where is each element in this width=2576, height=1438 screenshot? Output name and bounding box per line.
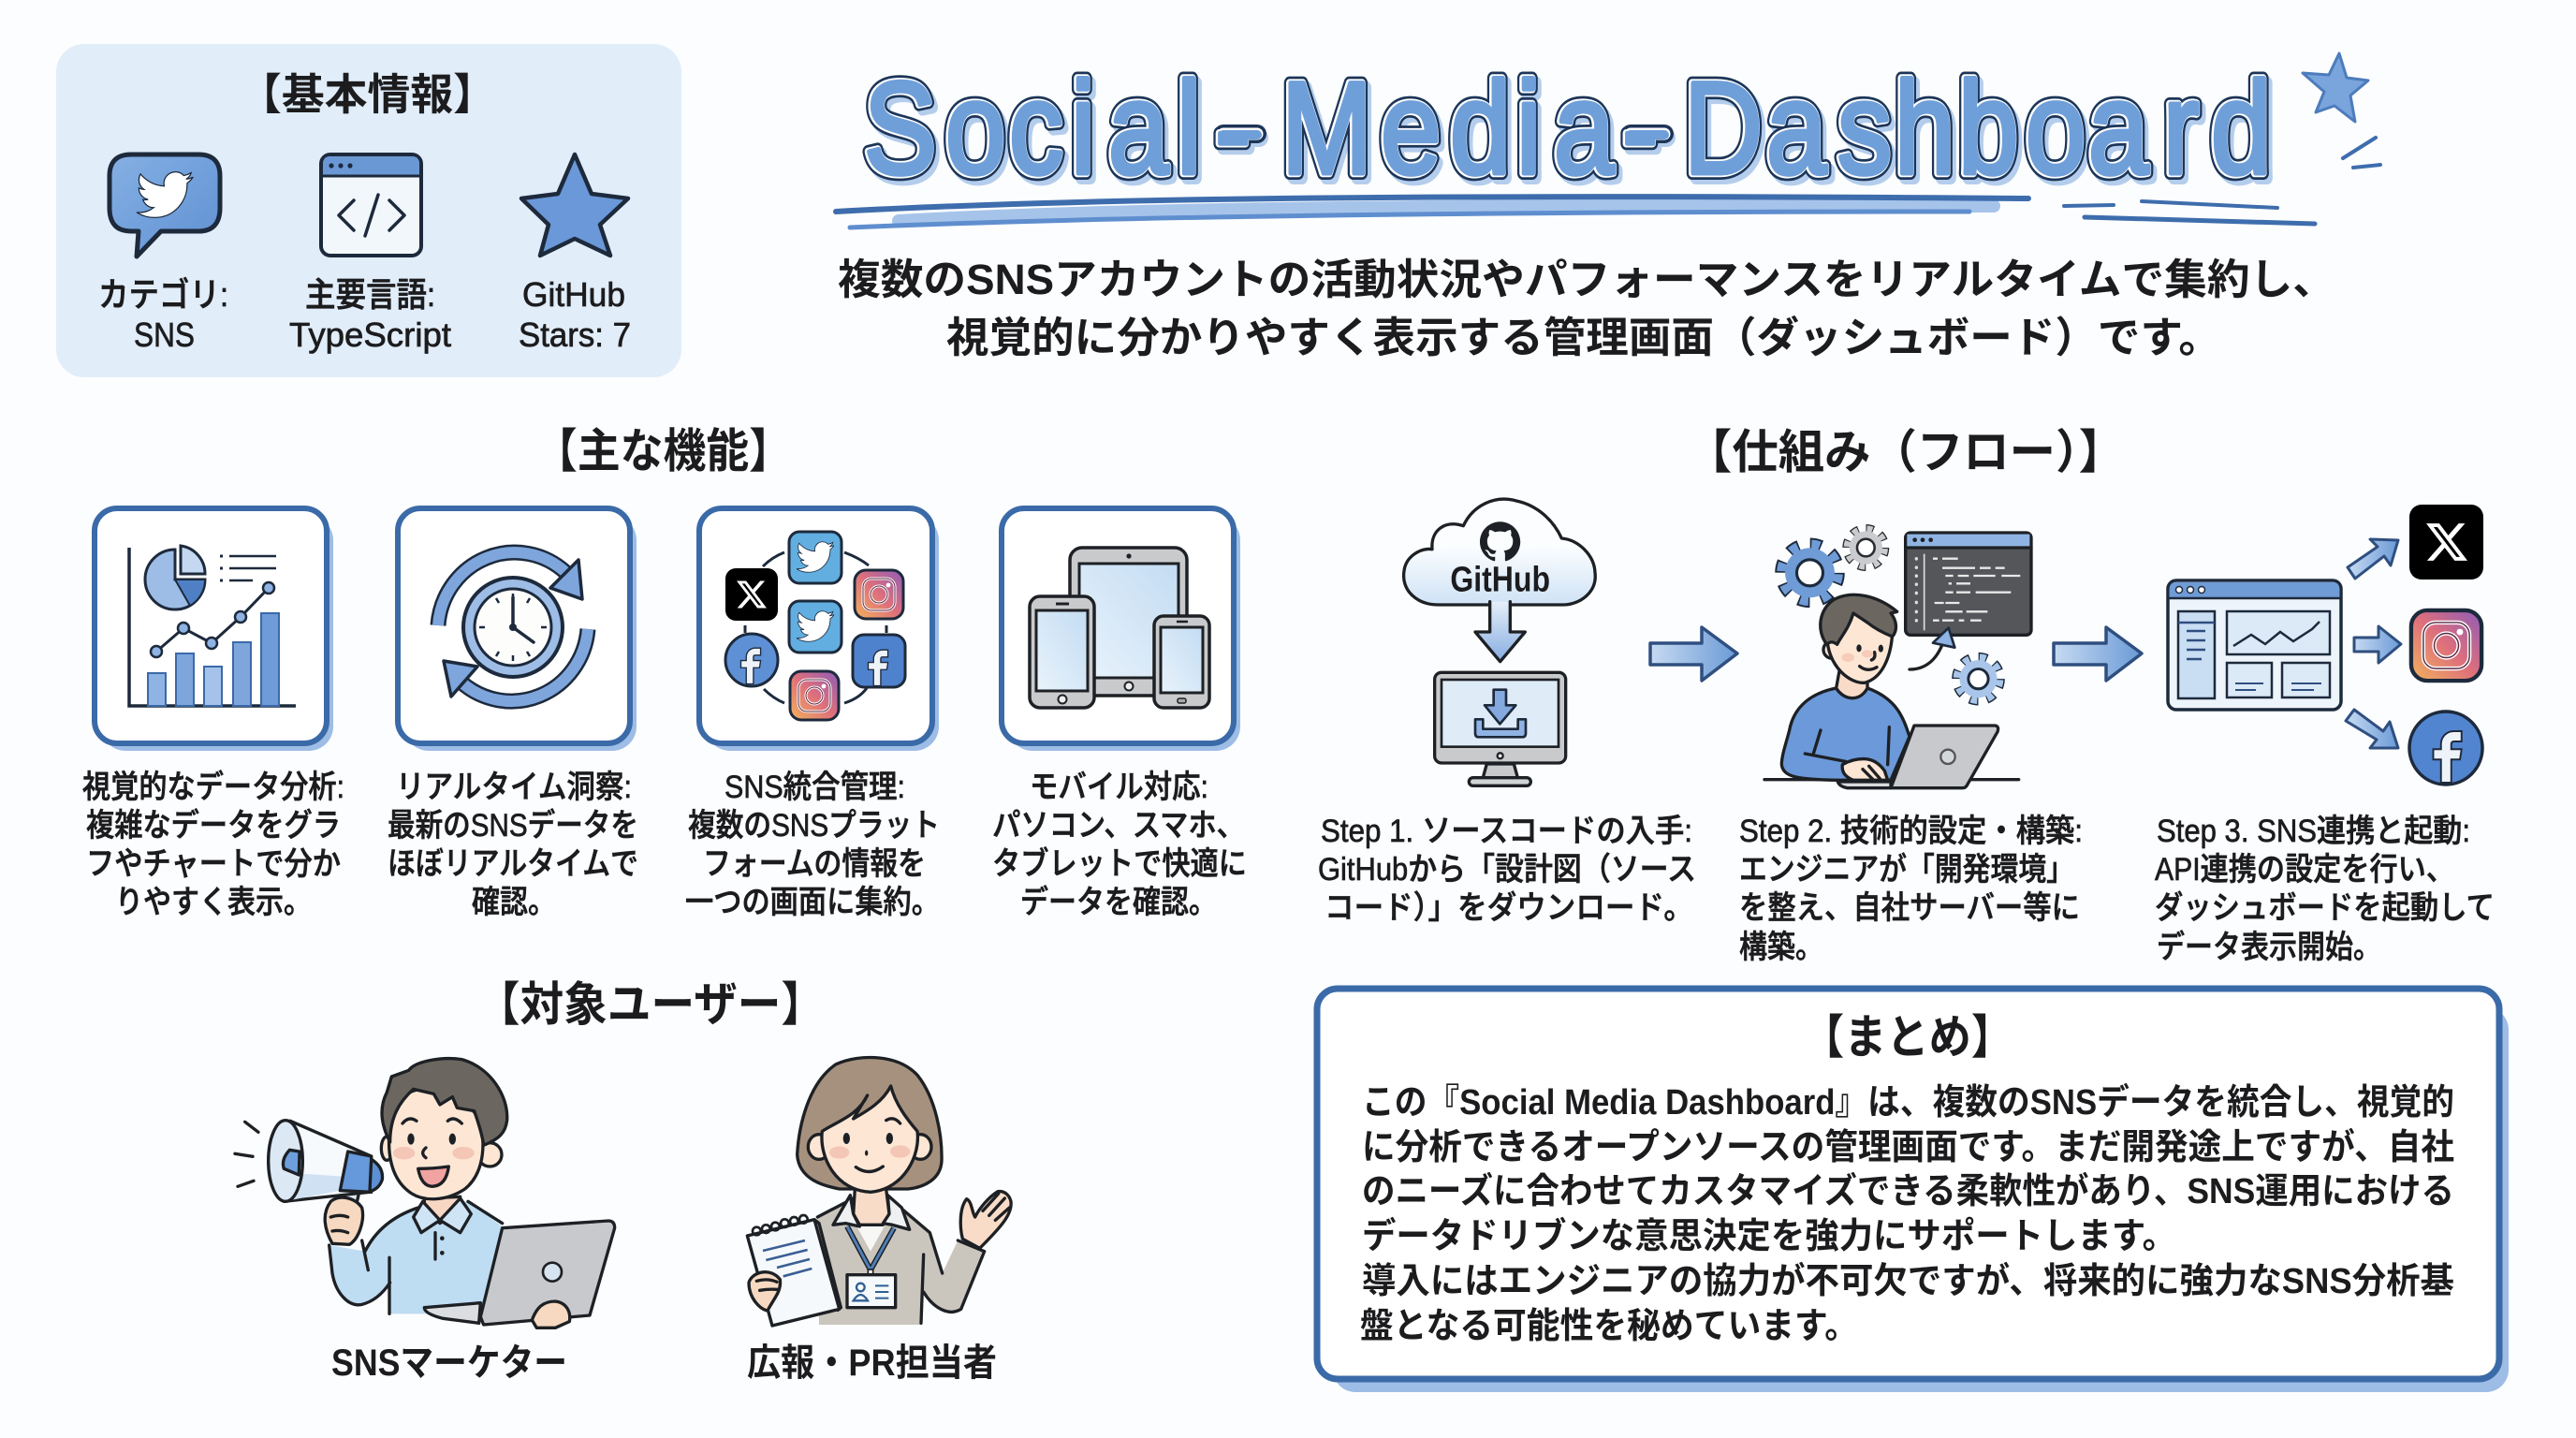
caption: step 3	[2155, 814, 2495, 965]
caption: data analysis: 複雑なデータをグラ	[86, 808, 341, 844]
icon: small arrow	[1910, 628, 1954, 669]
label: PR staff: 広報・PR担当者	[747, 1343, 997, 1384]
caption: step 1	[1318, 814, 1696, 926]
icon: GitHub cloud	[1404, 499, 1595, 605]
user: PR staff	[747, 1057, 1011, 1384]
icon: gears	[1782, 529, 1999, 700]
caption: SNS integration: 一つの画面に集約。	[685, 885, 940, 920]
caption: data analysis: フやチャートで分か	[86, 846, 341, 882]
icon: dashboard window	[2168, 580, 2341, 710]
icon: tablet and phones	[1030, 548, 1209, 708]
caption: step 1: コード）」をダウンロード。	[1325, 890, 1693, 926]
title: Social-Media-Dashboard: Social-Media-Dashboard	[867, 61, 2275, 206]
card: data analysis	[82, 508, 344, 920]
summary body text: 盤となる可能性を秘めています。	[1360, 1307, 1858, 1346]
summary body text	[1360, 1082, 2454, 1346]
caption: realtime insight: 最新のSNSデータを	[388, 808, 638, 844]
label: github stars	[519, 275, 631, 354]
caption: data analysis	[82, 770, 344, 920]
label: SNS marketer: SNSマーケター	[331, 1343, 567, 1384]
caption: data analysis: りやすく表示。	[115, 885, 312, 920]
caption: step 2: を整え、自社サーバー等に	[1739, 890, 2080, 926]
caption: step 1: Step 1. ソースコードの入手:	[1321, 814, 1692, 849]
summary body text: 導入にはエンジニアの協力が不可欠ですが、将来的に強力なSNS分析基	[1362, 1262, 2454, 1301]
label: category: SNS	[134, 315, 195, 354]
title: Social-Media-Dashboard: Social-Media-Dashboard	[863, 56, 2271, 201]
caption: step 1: GitHubから「設計図（ソース	[1318, 852, 1696, 888]
arrow: to Instagram	[2354, 626, 2401, 663]
icon: Instagram	[2411, 610, 2481, 681]
card: realtime insight	[388, 508, 638, 920]
arrow: download	[1475, 602, 1525, 662]
heading: main features: 【主な機能】	[534, 425, 792, 477]
card: SNS integration	[685, 508, 940, 920]
caption: step 2: Step 2. 技術的設定・構築:	[1739, 814, 2083, 849]
title: Social-Media-Dashboard: Social-Media-Dashboard	[863, 56, 2271, 201]
caption: realtime insight: 確認。	[472, 885, 556, 920]
subtitle	[838, 256, 2335, 361]
heading: summary: 【まとめ】	[1802, 1011, 2013, 1064]
arrow: step 1 to step 2	[1650, 627, 1737, 681]
laptop	[424, 1221, 615, 1328]
icon: Facebook	[2409, 712, 2482, 785]
caption: SNS integration: SNS統合管理:	[724, 770, 905, 805]
summary body text: に分析できるオープンソースの管理画面です。まだ開発途上ですが、自社	[1362, 1128, 2454, 1167]
chart: bars, pie and line	[129, 546, 296, 706]
caption: data analysis: 視覚的なデータ分析:	[82, 770, 344, 805]
step 3: SNS connection	[2155, 505, 2495, 965]
panel: summary	[1317, 989, 2509, 1392]
caption: SNS integration	[685, 770, 940, 920]
caption: step 2: エンジニアが「開発環境」	[1739, 852, 2074, 888]
summary body text: この『Social Media Dashboard』は、複数のSNSデータを統合し、視覚的	[1362, 1082, 2454, 1123]
caption: realtime insight: ほぼリアルタイムで	[388, 846, 638, 882]
caption: SNS integration: フォームの情報を	[703, 846, 926, 882]
title underline	[836, 197, 2315, 227]
step 2: technical setup	[1739, 529, 2083, 965]
icon: clock with circular arrows	[438, 552, 588, 701]
caption: step 2	[1739, 814, 2083, 965]
label: github stars: Stars: 7	[519, 315, 631, 354]
icon: X	[2409, 505, 2483, 580]
title: Social-Media-Dashboard: Social-Media-Dashboard	[864, 56, 2272, 201]
arrow: step 2 to step 3	[2054, 627, 2142, 681]
caption: step 3: Step 3. SNS連携と起動:	[2157, 814, 2470, 849]
heading: basic info: 【基本情報】	[239, 70, 496, 119]
icon: monitor	[1435, 672, 1566, 785]
label: category	[98, 275, 228, 354]
icon: star	[521, 154, 628, 256]
caption: mobile support	[992, 770, 1247, 920]
caption: mobile support: データを確認。	[1020, 885, 1217, 920]
caption: step 3: API連携の設定を行い、	[2155, 852, 2454, 888]
caption: SNS integration: 複数のSNSプラット	[688, 808, 940, 844]
label: category: カテゴリ:	[98, 275, 228, 314]
icon: SNS logo ring	[725, 532, 905, 720]
icon: code window	[321, 154, 421, 256]
subtitle: 複数のSNSアカウントの活動状況やパフォーマンスをリアルタイムで集約し、	[838, 256, 2335, 303]
caption: step 3: データ表示開始。	[2157, 930, 2381, 965]
heading: flow: 【仕組み（フロー）】	[1686, 426, 2125, 478]
card: mobile support	[992, 508, 1247, 920]
label: main language	[289, 275, 451, 354]
illustration: PR figure	[747, 1057, 1011, 1326]
arrow: to X	[2348, 539, 2398, 579]
notepad	[747, 1215, 841, 1326]
caption: step 2: 構築。	[1739, 930, 1823, 965]
icon: GitHub cloud: GitHub	[1450, 560, 1550, 600]
caption: realtime insight: リアルタイム洞察:	[396, 770, 632, 805]
panel: basic info	[56, 44, 681, 377]
arrow: to Facebook	[2346, 710, 2398, 748]
label: main language: TypeScript	[289, 315, 451, 354]
caption: realtime insight	[388, 770, 638, 920]
summary body text: データドリブンな意思決定を強力にサポートします。	[1362, 1216, 2176, 1256]
megaphone	[235, 1121, 383, 1244]
icon: code editor window	[1906, 533, 2031, 635]
label: github stars: GitHub	[522, 275, 625, 314]
illustration: cloud to monitor	[1404, 499, 1595, 785]
heading: target users: 【対象ユーザー】	[476, 978, 825, 1031]
label: main language: 主要言語:	[305, 275, 435, 314]
user: SNS marketer	[235, 1059, 615, 1384]
icon: twitter speech bubble	[110, 154, 220, 257]
step 1: source code download	[1318, 499, 1696, 926]
subtitle: 視覚的に分かりやすく表示する管理画面（ダッシュボード）です。	[946, 314, 2221, 361]
caption: mobile support: タブレットで快適に	[992, 846, 1247, 882]
caption: mobile support: パソコン、スマホ、	[992, 808, 1245, 844]
summary body text: のニーズに合わせてカスタマイズできる柔軟性があり、SNS運用における	[1362, 1171, 2454, 1211]
caption: step 3: ダッシュボードを起動して	[2155, 890, 2495, 926]
icon: title star	[2303, 53, 2380, 168]
illustration: engineer at laptop	[1764, 594, 2019, 788]
illustration: marketer figure	[235, 1059, 615, 1328]
illustration: engineer scene	[1764, 529, 2031, 788]
caption: mobile support: モバイル対応:	[1030, 770, 1208, 805]
